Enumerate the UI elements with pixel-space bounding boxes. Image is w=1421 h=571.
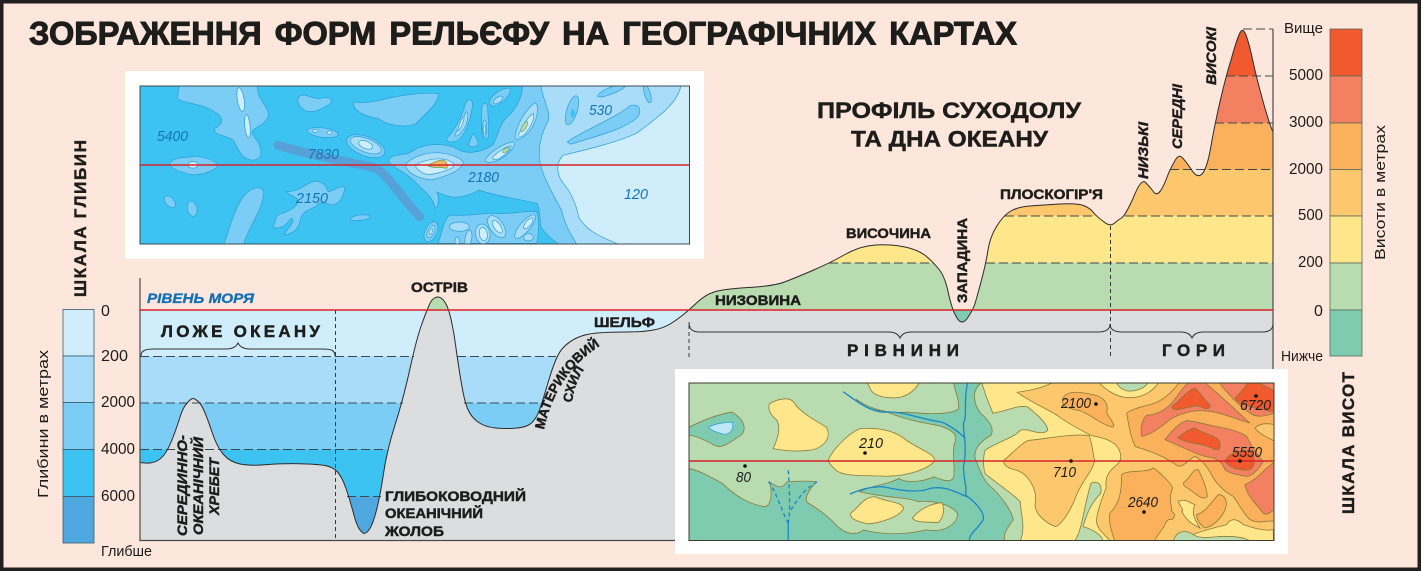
depth scale axis title: Глибини в метрах bbox=[35, 349, 52, 498]
label: mid-ocean ridge: СЕРЕДИННО- bbox=[174, 435, 190, 536]
label: mid-ocean ridge: ОКЕАНІЧНИЙ bbox=[189, 436, 206, 535]
chart: land and ocean profile bbox=[140, 20, 1273, 541]
depth scale values: 200 bbox=[101, 348, 128, 365]
label: plateau: ПЛОСКОГІР'Я bbox=[1000, 186, 1103, 202]
label: plains: РІВНИНИ bbox=[847, 341, 959, 360]
height scale bbox=[1281, 20, 1389, 514]
height scale values: Вище bbox=[1284, 20, 1323, 37]
depth scale values: 0 bbox=[101, 303, 110, 320]
subtitle: profile of land and ocean floor bbox=[817, 98, 1081, 152]
label: lowland: НИЗОВИНА bbox=[715, 292, 801, 308]
dashed height and depth lines bbox=[140, 29, 1273, 496]
map: land contours bbox=[690, 384, 1274, 540]
map: ocean contours bbox=[140, 86, 689, 244]
height scale title: ШКАЛА ВИСОТ bbox=[1339, 371, 1358, 514]
red section line on depth map bbox=[140, 164, 690, 166]
map elevation values: 80 bbox=[736, 469, 752, 486]
depth scale title: ШКАЛА ГЛИБИН bbox=[71, 140, 90, 297]
map elevation values bbox=[736, 395, 1272, 511]
map elevation points bbox=[743, 394, 1258, 514]
panel: height map bbox=[675, 369, 1288, 554]
label: continental slope: МАТЕРИКОВИЙ bbox=[534, 336, 600, 430]
title: ЗОБРАЖЕННЯ ФОРМ РЕЛЬЄФУ НА ГЕОГРАФІЧНИХ КАРТАХ bbox=[29, 16, 1018, 52]
label: upland: ВИСОЧИНА bbox=[846, 225, 931, 241]
depth scale values: Глибше bbox=[101, 543, 152, 560]
map outline bbox=[689, 383, 1274, 540]
map depth values: 5400 bbox=[157, 128, 189, 145]
label: mid-ocean ridge: ХРЕБЕТ bbox=[206, 457, 222, 516]
map frame bbox=[675, 369, 1288, 554]
height scale values: 3000 bbox=[1289, 114, 1323, 131]
height scale values: 200 bbox=[1298, 254, 1323, 271]
seamounts and islands on depth map bbox=[405, 88, 539, 247]
label: island: ОСТРІВ bbox=[411, 279, 468, 295]
label: shelf: ШЕЛЬФ bbox=[594, 314, 655, 330]
label: deep-sea trench: ОКЕАНІЧНИЙ bbox=[385, 504, 483, 521]
depth scale values: 2000 bbox=[101, 394, 135, 411]
map elevation values: 210 bbox=[858, 435, 884, 452]
height scale axis title: Висоти в метрах bbox=[1372, 124, 1389, 260]
sea level line bbox=[140, 309, 1273, 311]
brace: plains bbox=[689, 322, 1110, 338]
depth scale swatches bbox=[63, 310, 94, 543]
map elevation values: 2640 bbox=[1127, 494, 1159, 511]
height scale values: 0 bbox=[1314, 303, 1323, 320]
label: deep-sea trench: ЖОЛОБ bbox=[384, 523, 444, 539]
label: sea level: РІВЕНЬ МОРЯ bbox=[147, 290, 255, 306]
land and seabed fill bbox=[140, 20, 1273, 541]
depth scale values: 4000 bbox=[101, 441, 135, 458]
map depth values: 7830 bbox=[308, 146, 340, 163]
label: depression: ЗАПАДИНА bbox=[954, 218, 970, 303]
label: mountains: ГОРИ bbox=[1162, 341, 1225, 360]
map elevation values: 710 bbox=[1053, 464, 1077, 481]
label: mid-ocean ridge bbox=[174, 435, 222, 536]
height scale values: 5000 bbox=[1289, 67, 1323, 84]
map frame bbox=[125, 71, 704, 259]
depth scale bbox=[35, 140, 152, 560]
vertical dashed dividers bbox=[336, 226, 1110, 540]
map elevation values: 6720 bbox=[1240, 397, 1272, 414]
height scale values: Нижче bbox=[1281, 348, 1323, 365]
high relief contours on height map bbox=[1109, 381, 1275, 541]
depth scale values bbox=[101, 303, 152, 560]
map depth values bbox=[157, 102, 649, 207]
map elevation values: 5550 bbox=[1232, 444, 1263, 461]
height scale values: 2000 bbox=[1289, 161, 1323, 178]
axes bbox=[140, 29, 1273, 540]
depth scale values: 6000 bbox=[101, 488, 135, 505]
map outline bbox=[140, 86, 690, 244]
ocean depth bands bbox=[140, 310, 980, 540]
red section line on height map bbox=[689, 460, 1274, 462]
map elevation values: 2100 bbox=[1060, 395, 1092, 412]
brace: mountains bbox=[1110, 324, 1273, 338]
label: ocean floor: ЛОЖЕ ОКЕАНУ bbox=[161, 322, 320, 341]
label: medium mountains: СЕРЕДНІ bbox=[1169, 83, 1185, 149]
subtitle: profile of land and ocean floor: ПРОФІЛЬ СУХОДОЛУ bbox=[817, 98, 1081, 123]
height scale values bbox=[1281, 20, 1323, 365]
height scale swatches bbox=[1330, 29, 1362, 356]
panel: depth map bbox=[125, 71, 704, 259]
label: low mountains: НИЗЬКІ bbox=[1135, 121, 1151, 179]
map depth values: 530 bbox=[589, 102, 613, 119]
label: continental slope: СХИЛ bbox=[564, 365, 584, 402]
map depth values: 2150 bbox=[295, 190, 329, 207]
map depth values: 2180 bbox=[467, 169, 500, 186]
profile outline bbox=[140, 30, 1273, 533]
height scale values: 500 bbox=[1298, 207, 1323, 224]
map depth values: 120 bbox=[624, 186, 649, 203]
label: high mountains: ВИСОКІ bbox=[1203, 26, 1219, 85]
brace: ocean floor bbox=[141, 343, 335, 356]
subtitle: profile of land and ocean floor: ТА ДНА ОКЕАНУ bbox=[851, 126, 1048, 152]
label: deep-sea trench bbox=[384, 487, 526, 539]
label: deep-sea trench: ГЛИБОКОВОДНИЙ bbox=[385, 487, 526, 504]
